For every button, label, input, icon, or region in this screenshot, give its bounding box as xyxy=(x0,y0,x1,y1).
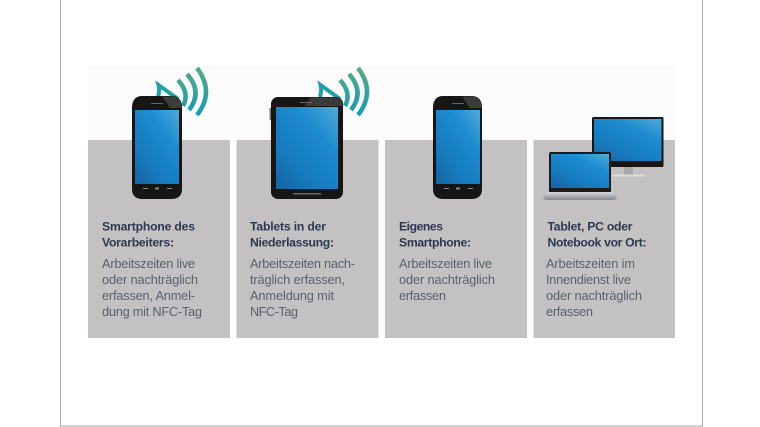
text: description 3 xyxy=(399,256,495,303)
text: description 4: erfassen xyxy=(546,304,593,319)
panel: Eigenes Smartphone xyxy=(385,140,527,338)
panel: Tablets in der Niederlassung xyxy=(236,140,378,338)
text: description 2: Anmeldung mit xyxy=(250,288,334,303)
text: description 3: erfassen xyxy=(399,288,446,303)
heading: Eigenes Smartphone: Eigenes xyxy=(399,220,443,234)
heading: Smartphone des Vorarbeiters xyxy=(102,220,195,250)
heading: Tablets in der Niederlassung: Niederlassung: xyxy=(250,236,334,250)
heading: Smartphone des Vorarbeiters: Smartphone des xyxy=(102,220,195,234)
text: description 2: träglich erfassen, xyxy=(250,272,345,287)
icon: NFC signal 1 xyxy=(158,68,206,115)
text: description 4: oder nachträglich xyxy=(546,288,642,303)
heading: Eigenes Smartphone xyxy=(399,220,471,250)
icon: smartphone 1 xyxy=(132,96,182,199)
text: description 2: Arbeitszeiten nach- xyxy=(250,256,355,271)
text: description 1: erfassen, Anmel- xyxy=(102,288,195,303)
text: description 3: Arbeitszeiten live xyxy=(399,256,492,271)
panel: Smartphone des Vorarbeiters xyxy=(88,140,230,338)
panel: Tablet, PC oder Notebook vor Ort xyxy=(534,140,675,338)
text: description 1: oder nachträglich xyxy=(102,272,198,287)
text: description 2 xyxy=(250,256,355,319)
icon: tablet xyxy=(270,97,343,199)
text: description 4 xyxy=(546,256,642,319)
icon: smartphone 2 xyxy=(433,96,482,199)
heading: Eigenes Smartphone: Smartphone: xyxy=(399,236,471,250)
upper background band xyxy=(88,65,675,140)
heading: Tablets in der Niederlassung xyxy=(250,220,334,250)
text: description 1: Arbeitszeiten live xyxy=(102,256,195,271)
heading: Tablet, PC oder Notebook vor Ort: Tablet, PC oder xyxy=(548,220,633,234)
text: description 2: NFC-Tag xyxy=(250,304,298,319)
text: description 4: Innendienst live xyxy=(546,272,631,287)
icon: NFC signal 2 xyxy=(320,68,367,115)
heading: Tablet, PC oder Notebook vor Ort: Notebook vor Ort: xyxy=(548,236,646,250)
icon: desktop monitor xyxy=(592,117,664,176)
heading: Tablets in der Niederlassung: Tablets in der xyxy=(250,220,326,234)
text: description 3: oder nachträglich xyxy=(399,272,495,287)
text: description 1 xyxy=(102,256,202,319)
heading: Tablet, PC oder Notebook vor Ort xyxy=(548,220,646,250)
text: description 1: dung mit NFC-Tag xyxy=(102,304,202,319)
icon: laptop xyxy=(543,152,617,200)
text: description 4: Arbeitszeiten im xyxy=(546,256,635,271)
heading: Smartphone des Vorarbeiters: Vorarbeiters: xyxy=(102,236,174,250)
